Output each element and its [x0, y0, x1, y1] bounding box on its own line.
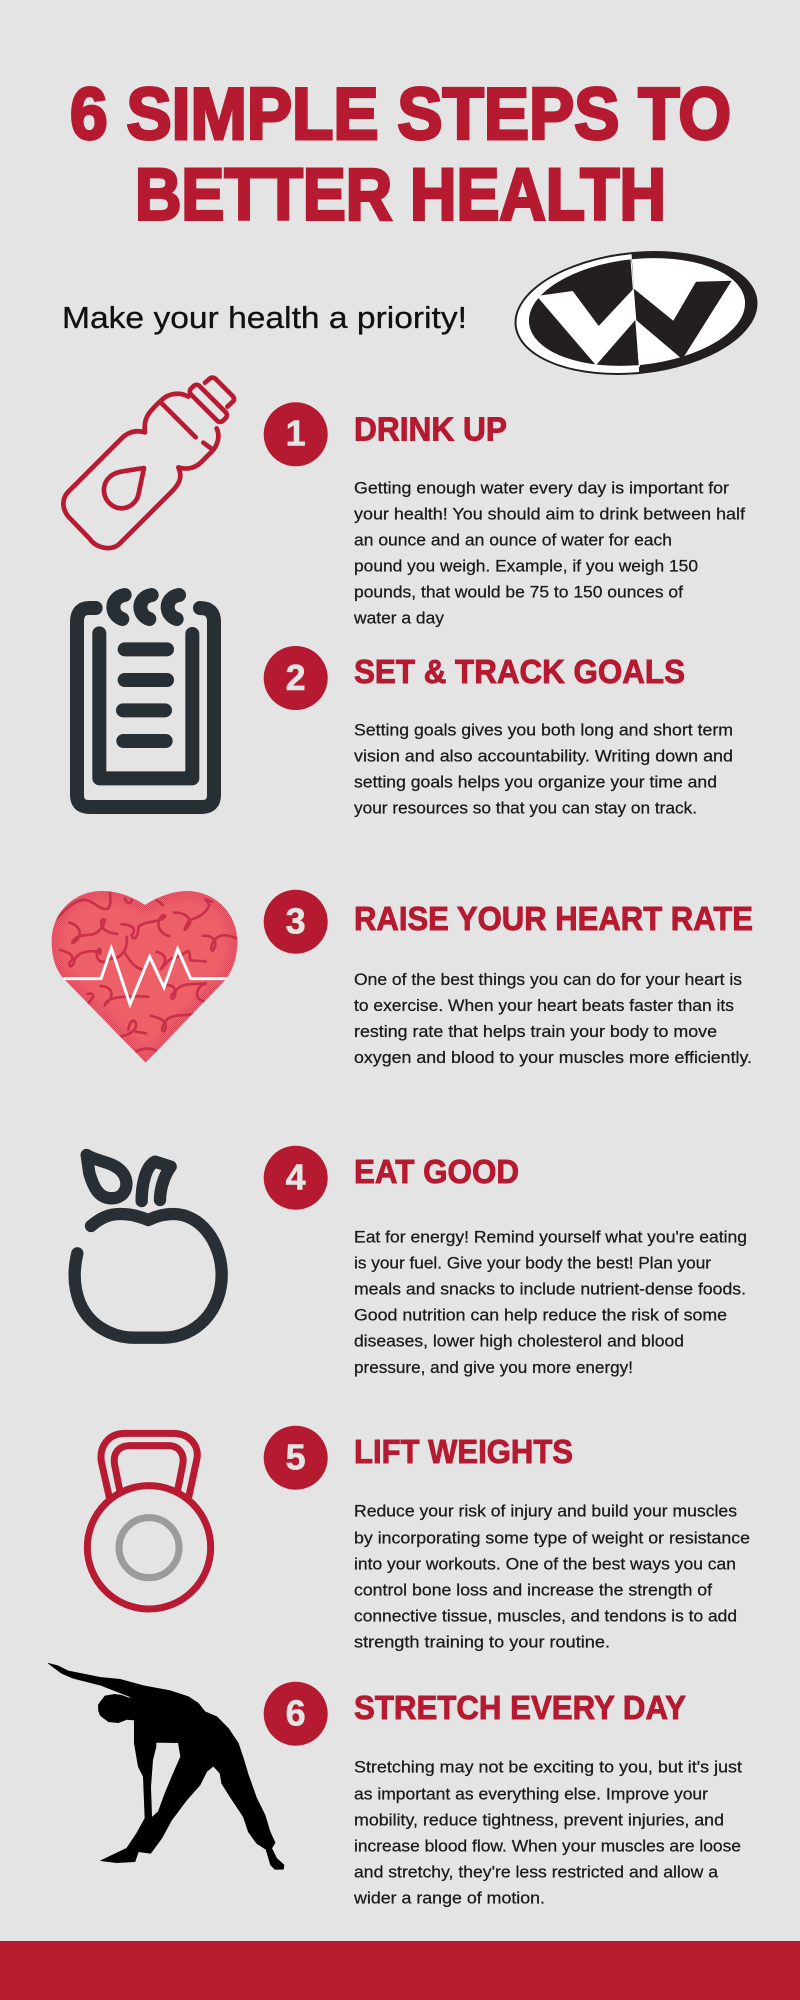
footer bar: [0, 1941, 800, 2000]
number badge 6: 6: [286, 1692, 306, 1734]
panel: step 2: [264, 646, 733, 817]
text: stretch every day: [353, 1758, 742, 1907]
panel: step 4: [264, 1146, 747, 1377]
text: set and track goals: Setting goals gives you both long and short term: [354, 721, 733, 739]
text: eat good: pressure, and give you more energy!: [354, 1359, 633, 1377]
text: stretch every day: mobility, reduce tightness, prevent injuries, and: [354, 1811, 724, 1829]
text: lift weights: [354, 1502, 750, 1651]
text: lift weights: by incorporating some type of weight or resistance: [354, 1529, 750, 1547]
text: stretch every day: wider a range of motion.: [353, 1889, 545, 1907]
text: lift weights: strength training to your routine.: [354, 1633, 610, 1651]
number badge 5: 5: [286, 1436, 306, 1478]
title: BETTER HEALTH: [135, 154, 666, 236]
number badge 3: [264, 890, 328, 954]
text: eat good: is your fuel. Give your body the best! Plan your: [354, 1254, 712, 1272]
text: lift weights: Reduce your risk of injury and build your muscles: [354, 1502, 737, 1520]
panel: step 5: [264, 1426, 750, 1651]
text: drink up: Getting enough water every day is important for: [354, 479, 730, 497]
text: raise your heart rate: [354, 971, 752, 1067]
text: eat good: Good nutrition can help reduce the risk of some: [354, 1306, 727, 1324]
icon: stretching figure: [48, 1663, 284, 1869]
text: stretch every day: Stretching may not be exciting to you, but it's just: [354, 1758, 742, 1776]
heading: eat good: EAT GOOD: [354, 1154, 519, 1191]
logo: [514, 251, 758, 375]
title: 6 SIMPLE STEPS TO: [70, 74, 731, 155]
heading: lift weights: LIFT WEIGHTS: [354, 1434, 573, 1471]
subtitle: Make your health a priority!: [62, 300, 467, 335]
number badge 4: [264, 1146, 328, 1210]
icon: apple: [75, 1155, 222, 1338]
text: set and track goals: vision and also accountability. Writing down and: [354, 747, 733, 765]
heading: drink up: DRINK UP: [354, 412, 507, 449]
text: set and track goals: [354, 721, 733, 817]
text: set and track goals: setting goals helps you organize your time and: [354, 773, 717, 791]
icon: clipboard: [77, 595, 214, 807]
text: raise your heart rate: resting rate that helps train your body to move: [354, 1023, 717, 1041]
number badge 2: 2: [286, 657, 306, 698]
text: lift weights: connective tissue, muscles, and tendons is to add: [354, 1607, 737, 1625]
text: raise your heart rate: oxygen and blood to your muscles more efficiently.: [354, 1049, 752, 1067]
heading: raise your heart rate: RAISE YOUR HEART RATE: [354, 901, 753, 938]
text: lift weights: into your workouts. One of the best ways you can: [354, 1555, 736, 1573]
icon: kettlebell: [87, 1433, 211, 1609]
text: drink up: water a day: [353, 609, 445, 627]
heading: set and track goals: SET & TRACK GOALS: [354, 654, 685, 691]
icon: heart with pulse: [52, 891, 238, 1062]
number badge 4: 4: [286, 1156, 306, 1198]
text: eat good: diseases, lower high cholesterol and blood: [354, 1332, 684, 1350]
title: [70, 74, 731, 236]
text: eat good: meals and snacks to include nutrient-dense foods.: [354, 1280, 746, 1298]
number badge 1: [264, 402, 328, 466]
number badge 6: [264, 1682, 328, 1746]
panel: step 1: [264, 402, 745, 627]
number badge 3: 3: [286, 900, 306, 942]
text: lift weights: control bone loss and increase the strength of: [354, 1581, 712, 1599]
text: raise your heart rate: One of the best things you can do for your heart is: [354, 971, 742, 989]
text: stretch every day: increase blood flow. When your muscles are loose: [354, 1837, 741, 1855]
text: raise your heart rate: to exercise. When your heart beats faster than its: [354, 997, 734, 1015]
panel: step 6: [264, 1682, 742, 1907]
number badge 1: 1: [286, 412, 306, 454]
text: drink up: your health! You should aim to drink between half: [354, 505, 745, 523]
number badge 5: [264, 1426, 328, 1490]
text: stretch every day: as important as everything else. Improve your: [354, 1785, 709, 1803]
text: drink up: pounds, that would be 75 to 150 ounces of: [354, 583, 683, 601]
text: drink up: an ounce and an ounce of water for each: [354, 531, 672, 549]
number badge 2: [264, 646, 328, 710]
icon: water bottle: [63, 378, 234, 548]
text: eat good: [354, 1228, 747, 1377]
text: drink up: pound you weigh. Example, if you weigh 150: [354, 557, 698, 575]
text: stretch every day: and stretchy, they're less restricted and allow a: [354, 1863, 719, 1881]
heading: stretch every day: STRETCH EVERY DAY: [354, 1690, 686, 1727]
text: eat good: Eat for energy! Remind yourself what you're eating: [354, 1228, 747, 1246]
text: set and track goals: your resources so that you can stay on track.: [354, 799, 697, 817]
panel: step 3: [264, 890, 753, 1067]
text: drink up: [353, 479, 745, 627]
